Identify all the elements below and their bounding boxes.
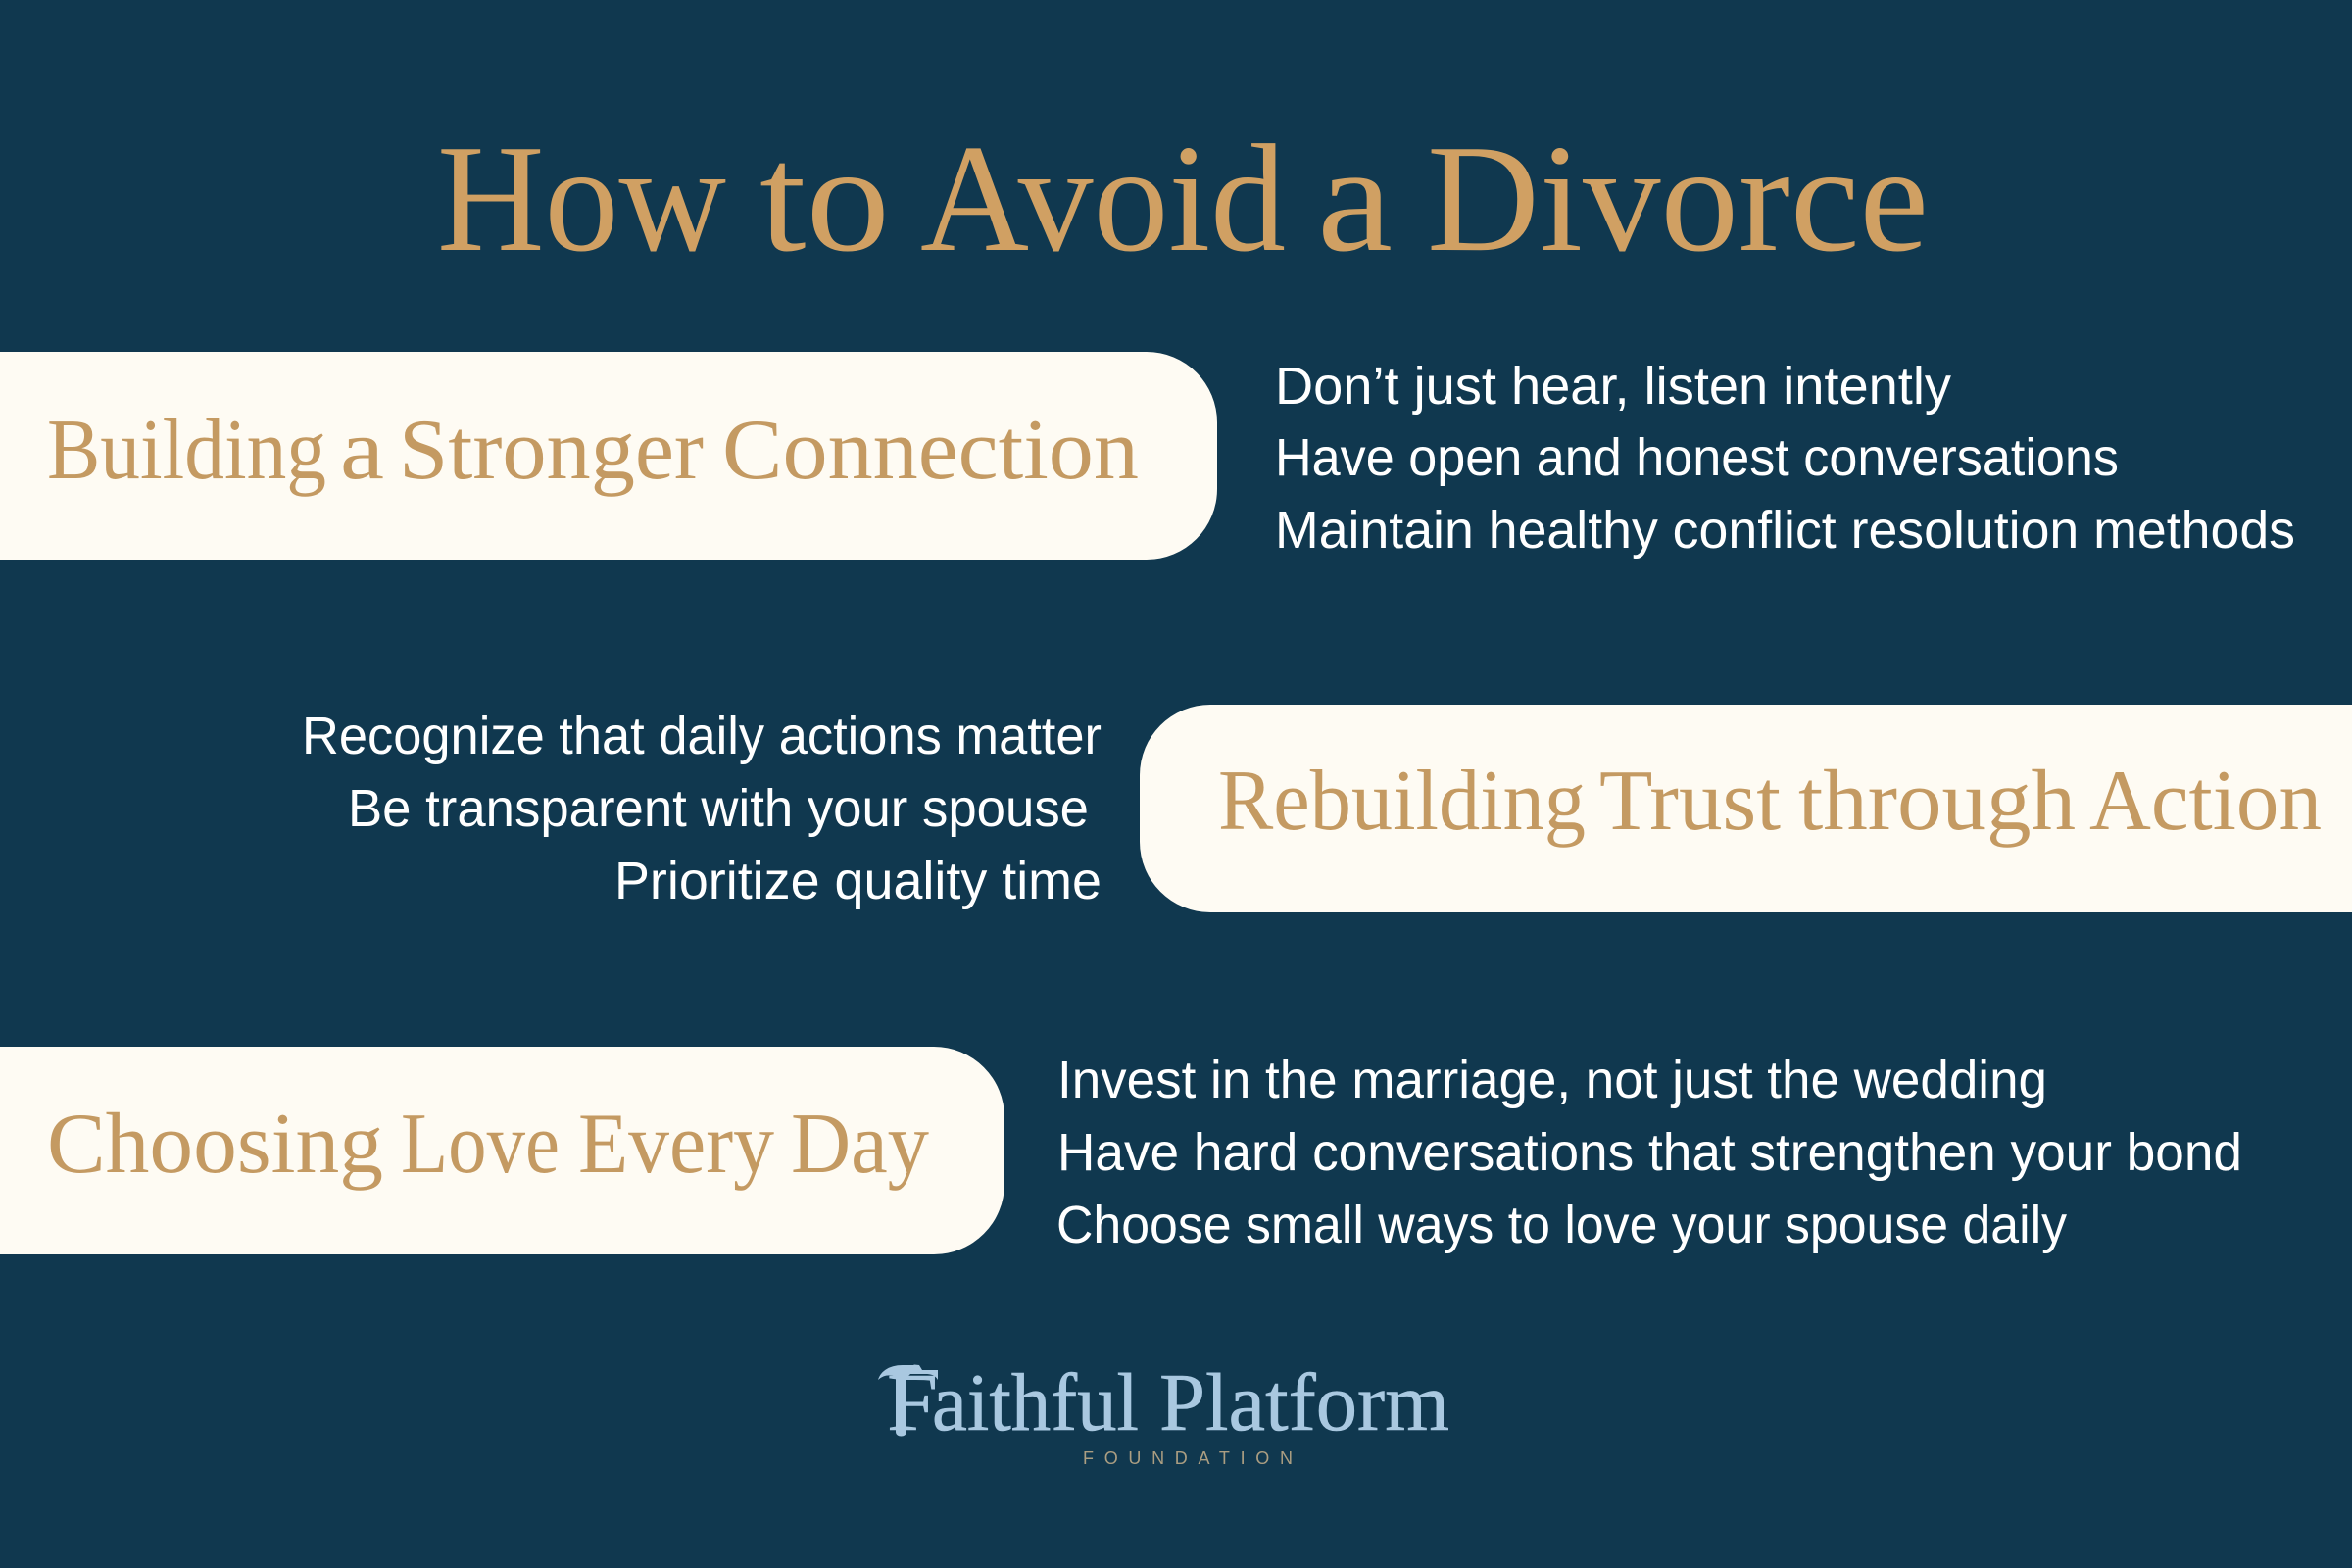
text block: love tips (1056, 1051, 2242, 1254)
icon: hammer forming the letter F (878, 1364, 938, 1437)
wordmark: Platform (1159, 1357, 1449, 1448)
text block: connection tips: Have open and honest conversations (1275, 428, 2119, 487)
heading: Choosing Love Every Day: Choosing (47, 1097, 383, 1192)
heading: Building a Stronger Connection: a (340, 403, 384, 498)
text block: trust tips: Be transparent with your spouse (348, 779, 1089, 838)
wordmark: aithful (932, 1357, 1139, 1448)
foundation label: FOUNDATION (1083, 1448, 1293, 1468)
heading: Choosing Love Every Day: Love (401, 1097, 560, 1192)
text block: love tips: Invest in the marriage, not just the wedding (1057, 1051, 2047, 1109)
heading: Building a Stronger Connection: Stronger (399, 403, 704, 498)
text block: love tips: Have hard conversations that strengthen your bond (1057, 1123, 2242, 1182)
heading: Building a Stronger Connection: Building (47, 403, 326, 498)
heading: Rebuilding Trust through Action: Rebuilding (1218, 754, 1586, 849)
text block: trust tips: Prioritize quality time (614, 852, 1102, 910)
logo: Faithful Platform Foundation (878, 1357, 1449, 1468)
text block: trust tips: Recognize that daily actions matter (302, 707, 1102, 765)
heading: Choosing Love Every Day: Every (578, 1097, 774, 1192)
heading: Rebuilding Trust through Action: Action (2089, 754, 2322, 849)
text block: connection tips (1275, 357, 2295, 560)
heading: Building a Stronger Connection: Connection (722, 403, 1139, 498)
text block: trust tips (302, 707, 1102, 910)
panel: Building a Stronger Connection (0, 352, 1217, 560)
title: Avoid (920, 113, 1286, 283)
text block: love tips: Choose small ways to love your spouse daily (1056, 1196, 2067, 1254)
panel: Choosing Love Every Day (0, 1047, 1004, 1254)
title: Divorce (1427, 113, 1929, 283)
heading: Choosing Love Every Day: Day (791, 1097, 929, 1192)
wordmark: F (887, 1357, 938, 1448)
heading: Rebuilding Trust through Action: through (1798, 754, 2076, 849)
title: a (1317, 113, 1393, 283)
panel: Rebuilding Trust through Action (1140, 705, 2352, 912)
heading: Rebuilding Trust through Action: Trust (1599, 754, 1781, 849)
text block: connection tips: Maintain healthy conflict resolution methods (1275, 501, 2295, 560)
text block: connection tips: Don’t just hear, listen intently (1275, 357, 1951, 416)
title: How (437, 113, 726, 283)
title: to (760, 113, 890, 283)
